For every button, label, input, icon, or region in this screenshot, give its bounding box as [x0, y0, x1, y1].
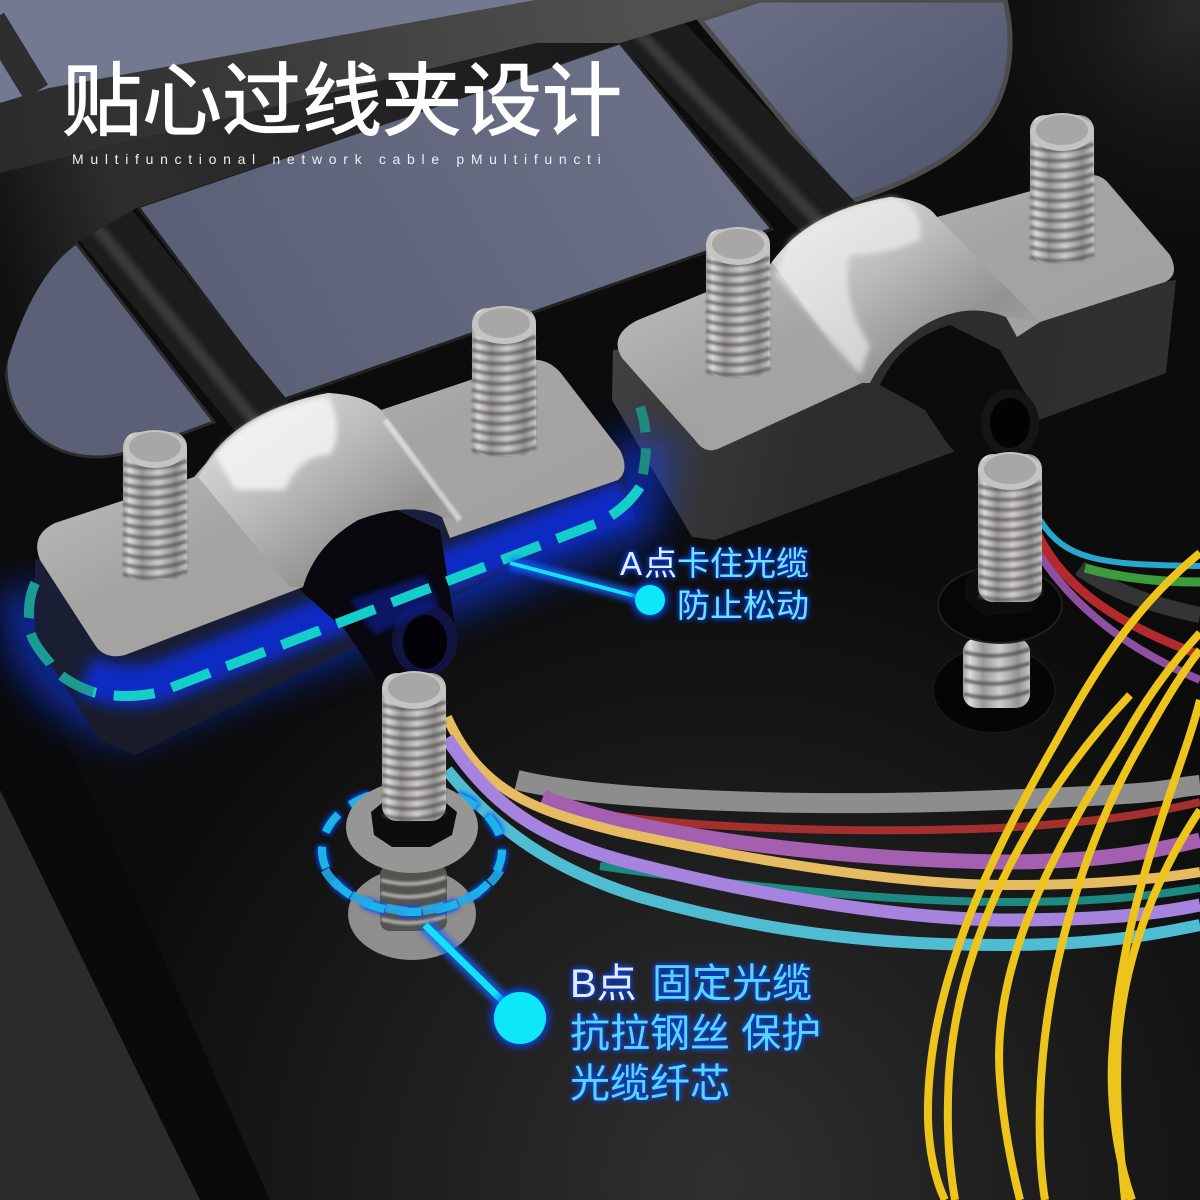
callout A: 卡住光缆 — [677, 545, 809, 582]
centre bolt assembly — [322, 671, 502, 960]
lower thread — [380, 865, 447, 931]
clip top plate — [37, 360, 625, 656]
callout A: 防止松动 — [677, 587, 809, 624]
clip hump — [772, 197, 1040, 383]
lower bolt head — [933, 647, 1055, 733]
callout B: 抗拉钢丝 保护 — [570, 1012, 821, 1056]
callout A — [620, 545, 809, 624]
bolt head — [348, 868, 476, 960]
cable stub — [880, 325, 1039, 478]
subtitle: Multifunctional network cable pMultifuncti — [72, 151, 607, 167]
dashed ring rear — [322, 788, 502, 912]
upper bolt — [382, 671, 446, 821]
black washer — [938, 567, 1062, 643]
callout B: 固定光缆 — [652, 962, 812, 1006]
bolt — [472, 306, 536, 456]
cable stub — [300, 505, 458, 690]
tray wall lower left — [0, 590, 270, 1200]
upper bolt — [978, 452, 1042, 602]
clip hump — [198, 393, 467, 587]
upper fibres — [1038, 520, 1200, 680]
title: 贴心过线夹设计 — [62, 57, 622, 146]
right cable clip — [612, 113, 1176, 540]
nut — [371, 798, 457, 847]
left clip blue glow — [30, 440, 645, 712]
right bolt assembly — [933, 452, 1062, 733]
bolt — [123, 430, 187, 580]
washer — [346, 781, 478, 873]
clip top plate — [618, 175, 1174, 450]
lower fibres — [447, 717, 1200, 945]
callout A: A — [620, 545, 642, 582]
callout A: 点 — [644, 545, 677, 582]
blue base band — [85, 500, 630, 686]
leader B — [425, 925, 546, 1044]
callout B: 光缆纤芯 — [570, 1062, 730, 1106]
left cable clip — [35, 306, 630, 755]
callout B: B点 — [570, 962, 637, 1006]
yellow fibre loops — [928, 553, 1200, 1200]
clip base — [35, 465, 630, 755]
blue plate sections — [0, 0, 1010, 457]
clip base — [612, 280, 1176, 540]
bolt — [706, 227, 770, 377]
dark rods — [0, 20, 855, 425]
dashed ring front — [325, 870, 500, 912]
bolt — [1030, 113, 1094, 263]
callout B — [570, 962, 821, 1106]
top right corner light — [880, 0, 1200, 320]
lower thread — [963, 638, 1030, 708]
nut — [965, 570, 1045, 616]
dashed outline around clip A — [28, 407, 646, 696]
top frame band — [0, 0, 760, 400]
leader A — [510, 563, 665, 615]
